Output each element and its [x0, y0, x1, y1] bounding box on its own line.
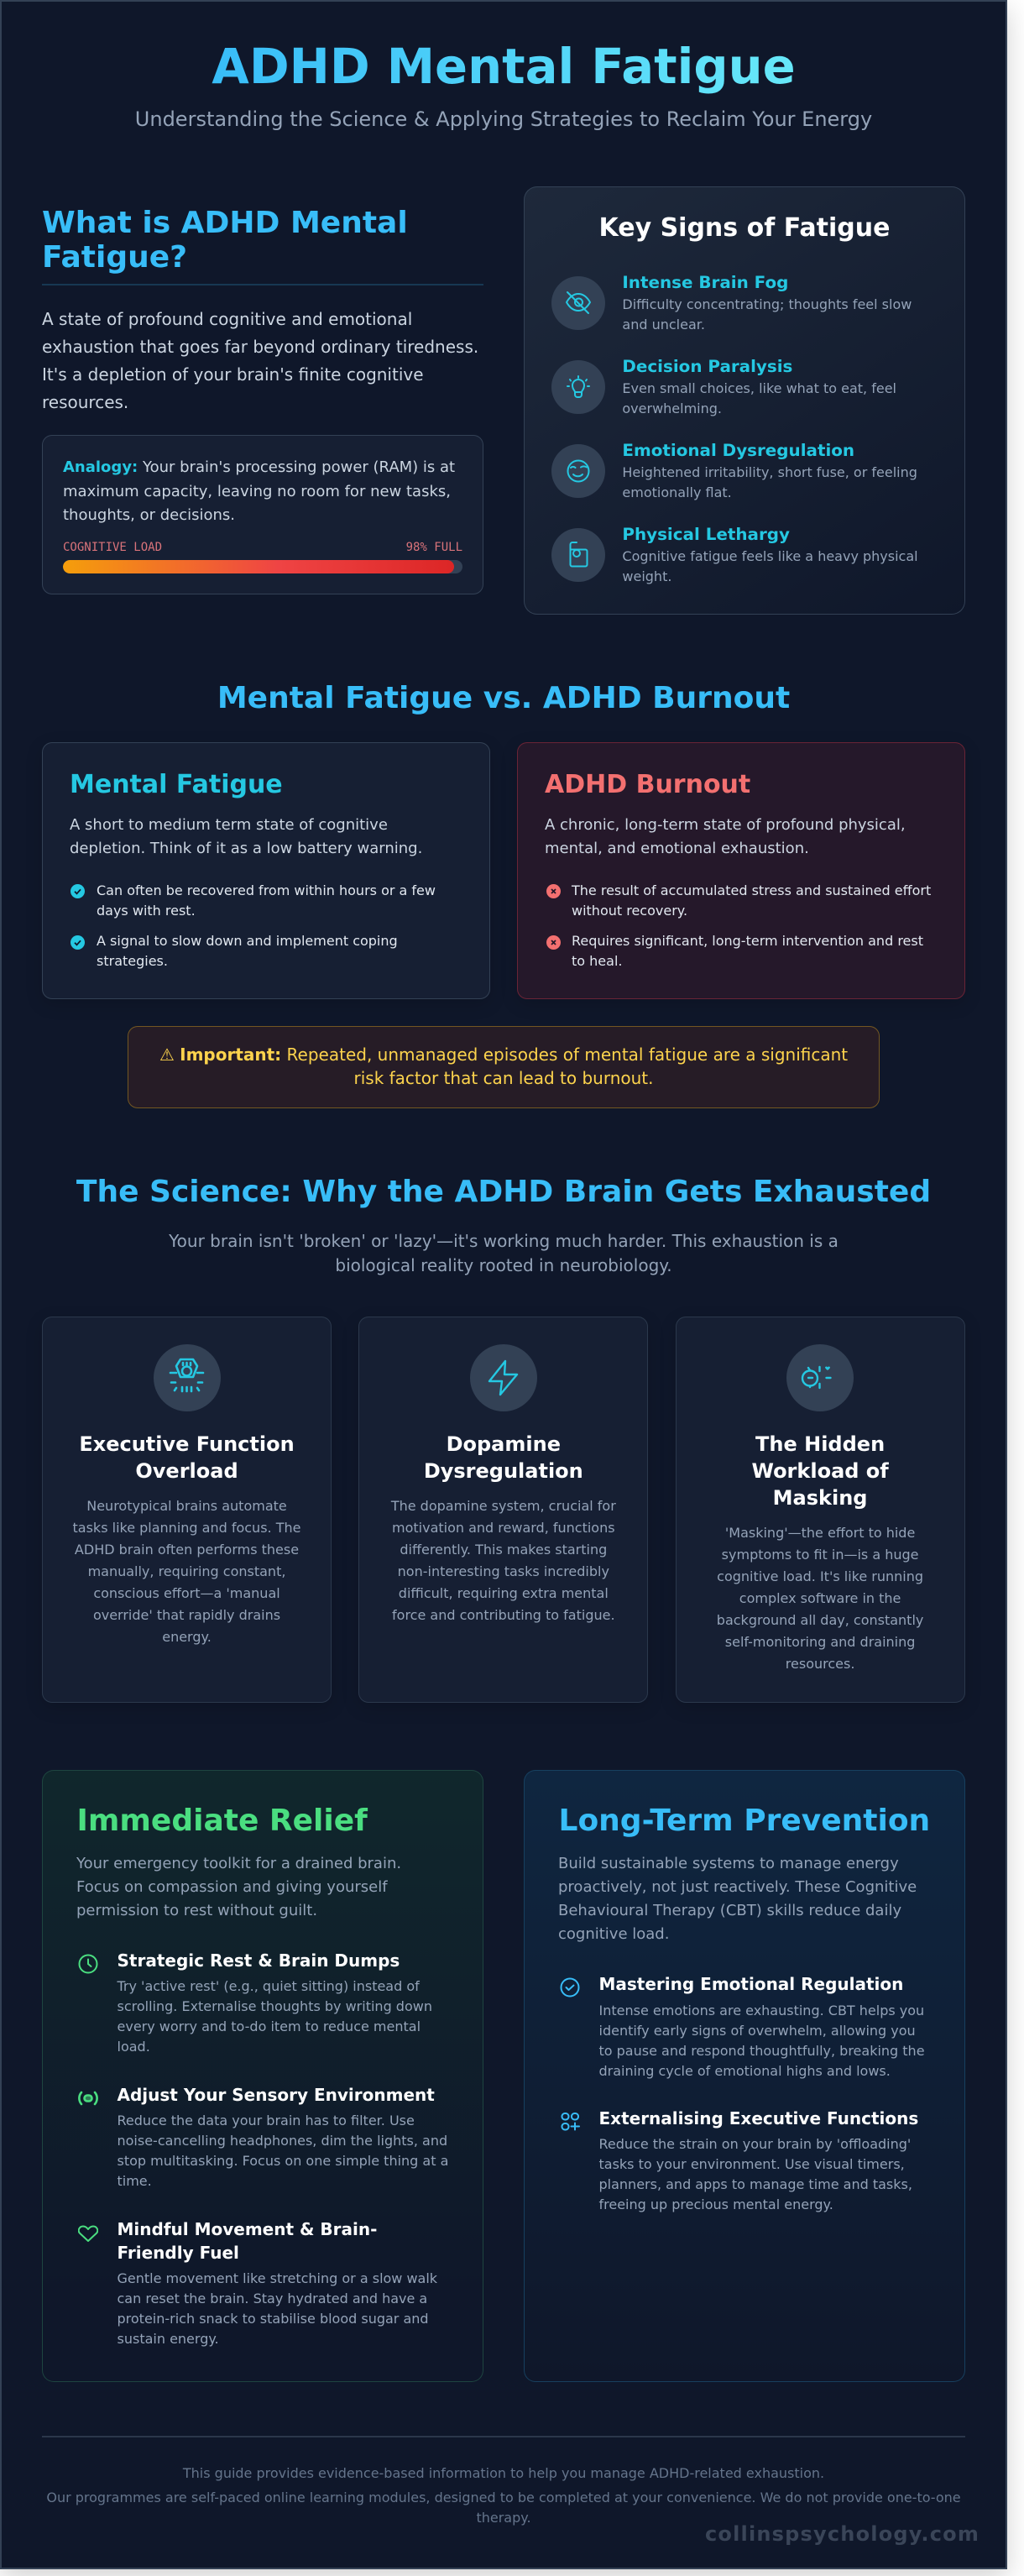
sign: brain fog text: Difficulty concentrating; thoughts feel slow — [622, 296, 912, 312]
sign: physical lethargy title: Physical Lethargy — [622, 525, 790, 544]
card text: ADHD brain often performs these — [75, 1542, 299, 1557]
card text — [72, 1498, 300, 1644]
list item text: A signal to slow down and implement coping — [97, 932, 398, 949]
definition text: resources. — [42, 392, 128, 412]
relief item text: time. — [118, 2173, 152, 2188]
icon: face — [551, 444, 605, 498]
icon: heart — [78, 2225, 98, 2242]
prevention intro: proactively, not just reactively. These Cognitive — [558, 1878, 917, 1896]
footer note: This guide provides evidence-based information to help you manage ADHD-related exhaustion. — [183, 2465, 824, 2481]
list item text — [97, 932, 398, 969]
relief item text: protein-rich snack to stabilise blood sugar and — [118, 2311, 429, 2326]
card heading: Workload of — [751, 1459, 889, 1483]
panel: long-term prevention — [524, 1770, 965, 2382]
relief heading: Immediate Relief — [77, 1804, 368, 1837]
sign: emotional dysregulation title: Emotional Dysregulation — [622, 441, 854, 460]
panel: immediate relief — [42, 1770, 483, 2382]
relief item text: scrolling. Externalise thoughts by writing down — [118, 1998, 432, 2013]
relief item text — [118, 2113, 448, 2188]
relief intro: permission to rest without guilt. — [76, 1902, 317, 1919]
prevention item text: planners, and apps to manage time and tasks, — [599, 2176, 912, 2191]
card text: conscious effort—a 'manual — [93, 1585, 280, 1600]
sign: decision paralysis text — [622, 380, 896, 416]
sign: decision paralysis title: Decision Paralysis — [622, 357, 792, 376]
footer disclaimer: Our programmes are self-paced online learning modules, designed to be completed at your convenience. We do not provide one-to-one — [46, 2489, 961, 2505]
definition text — [42, 309, 478, 412]
footer disclaimer: therapy. — [476, 2509, 531, 2526]
icon: brain — [154, 1344, 221, 1411]
icon: squares plus — [560, 2112, 580, 2132]
panel: executive function overload — [42, 1317, 332, 1703]
list item text: The result of accumulated stress and sustained effort — [572, 882, 931, 898]
card heading: Masking — [773, 1486, 868, 1510]
relief intro: Focus on compassion and giving yourself — [76, 1878, 388, 1896]
callout text: ⚠ Important: Repeated, unmanaged episodes of mental fatigue are a significant — [159, 1045, 848, 1065]
heading: fatigue vs burnout: Mental Fatigue vs. ADHD Burnout — [217, 681, 790, 715]
card heading: Dysregulation — [424, 1459, 583, 1483]
callout text: risk factor that can lead to burnout. — [354, 1068, 653, 1088]
card text: tasks like planning and focus. The — [73, 1520, 300, 1535]
card text: The dopamine system, crucial for — [391, 1498, 616, 1513]
icon: sensory signal — [78, 2091, 98, 2106]
label: cognitive load: COGNITIVE LOAD — [63, 541, 162, 554]
icon: weight — [551, 528, 605, 582]
relief item text: every worry and to-do item to reduce mental — [118, 2018, 421, 2034]
relief item text: Reduce the data your brain has to filter. Use — [118, 2113, 415, 2128]
heading: what is ADHD mental fatigue: Fatigue? — [42, 240, 187, 275]
progress fill 98% — [63, 560, 454, 573]
icon: cross — [546, 884, 561, 898]
card text: 'Masking'—the effort to hide — [725, 1525, 915, 1540]
card text: Neurotypical brains automate — [86, 1498, 287, 1513]
panel: analogy — [42, 435, 483, 594]
sign: emotional dysregulation text: emotionally flat. — [622, 484, 732, 500]
icon: check — [71, 884, 85, 898]
icon: masking — [786, 1344, 854, 1411]
analogy text: maximum capacity, leaving no room for new tasks, — [63, 483, 451, 500]
mental fatigue description: A short to medium term state of cognitive — [70, 816, 388, 834]
icon: cross — [546, 935, 561, 950]
card heading — [751, 1432, 889, 1510]
burnout description — [545, 816, 906, 857]
analogy text — [63, 458, 455, 524]
relief intro — [76, 1854, 401, 1919]
card heading: Overload — [135, 1459, 238, 1483]
definition text: It's a depletion of your brain's finite cognitive — [42, 364, 424, 385]
prevention item text: Reduce the strain on your brain by 'offloading' — [599, 2136, 911, 2151]
sign: decision paralysis text: Even small choices, like what to eat, feel — [622, 380, 896, 396]
key signs heading: Key Signs of Fatigue — [599, 213, 890, 243]
relief item text: sustain energy. — [118, 2331, 219, 2346]
science intro text: biological reality rooted in neurobiology. — [335, 1255, 672, 1275]
card text: symptoms to fit in—is a huge — [722, 1547, 918, 1562]
icon: eye off — [551, 276, 605, 330]
list item text — [571, 882, 931, 919]
panel: hidden workload of masking — [676, 1317, 965, 1703]
card heading: The Hidden — [755, 1432, 885, 1456]
callout text — [159, 1045, 848, 1088]
burnout description: mental, and emotional exhaustion. — [545, 840, 809, 857]
relief item text: Try 'active rest' (e.g., quiet sitting) instead of — [118, 1978, 420, 1993]
sign: physical lethargy text: weight. — [622, 568, 671, 584]
card heading — [79, 1432, 295, 1483]
icon: lightning — [470, 1344, 537, 1411]
relief item text: can reset the brain. Stay hydrated and have a — [118, 2291, 427, 2306]
card text: override' that rapidly drains — [93, 1607, 280, 1622]
sign: physical lethargy text — [622, 548, 918, 584]
card text: cognitive load. It's like running — [717, 1568, 923, 1584]
card text: energy. — [162, 1629, 212, 1644]
card text — [391, 1498, 616, 1622]
relief item text: noise-cancelling headphones, dim the lights, and — [118, 2133, 447, 2148]
card text: resources. — [786, 1656, 854, 1671]
card heading: Executive Function — [79, 1432, 295, 1456]
heading: the science: The Science: Why the ADHD Brain Gets Exhausted — [76, 1174, 931, 1209]
prevention intro: cognitive load. — [558, 1925, 669, 1943]
burnout description: A chronic, long-term state of profound physical, — [545, 816, 906, 834]
callout: important — [128, 1026, 880, 1108]
relief item text: load. — [118, 2039, 150, 2054]
prevention item text: identify early signs of overwhelm, allowing you — [599, 2022, 916, 2039]
relief item heading — [118, 2219, 377, 2263]
icon: check — [71, 935, 85, 950]
relief intro: Your emergency toolkit for a drained brain. — [76, 1854, 401, 1872]
panel: key signs of fatigue — [524, 186, 965, 615]
icon: clock — [79, 1955, 97, 1973]
card heading — [424, 1432, 583, 1483]
sign: emotional dysregulation text: Heightened irritability, short fuse, or feeling — [622, 464, 917, 480]
list item text: strategies. — [97, 952, 168, 969]
prevention item text: freeing up precious mental energy. — [599, 2196, 833, 2212]
card text: force and contributing to fatigue. — [392, 1607, 615, 1622]
card text: difficult, requiring extra mental — [399, 1585, 609, 1600]
progress bar — [63, 560, 462, 573]
label: 98% full: 98% FULL — [406, 541, 462, 554]
relief item heading: Friendly Fuel — [118, 2243, 239, 2263]
sign: decision paralysis text: overwhelming. — [622, 401, 722, 416]
list item text: Can often be recovered from within hours or a few — [97, 882, 436, 898]
heading: what is ADHD mental fatigue: What is ADHD Mental — [42, 206, 408, 240]
analogy text: Analogy: Your brain's processing power (RAM) is at — [63, 458, 455, 476]
sign: brain fog text: and unclear. — [622, 317, 705, 332]
prevention item text: tasks to your environment. Use visual timers, — [599, 2156, 905, 2171]
card text: manually, requiring constant, — [88, 1563, 285, 1579]
list item text: without recovery. — [572, 902, 687, 919]
sign: physical lethargy text: Cognitive fatigue feels like a heavy physical — [622, 548, 918, 564]
heading: what is ADHD mental fatigue — [42, 206, 408, 275]
prevention item heading: Mastering Emotional Regulation — [599, 1974, 903, 1994]
panel: mental fatigue — [42, 742, 490, 999]
icon: check circle — [560, 1977, 580, 1997]
mental fatigue description — [70, 816, 422, 857]
card text: non-interesting tasks incredibly — [398, 1563, 609, 1579]
prevention item heading: Externalising Executive Functions — [599, 2108, 918, 2128]
list item text: days with rest. — [97, 902, 196, 919]
footer disclaimer — [0, 2487, 1007, 2527]
relief item heading: Adjust Your Sensory Environment — [118, 2085, 435, 2105]
analogy text: thoughts, or decisions. — [63, 506, 235, 524]
card text: complex software in the — [739, 1590, 901, 1605]
relief item heading: Strategic Rest & Brain Dumps — [118, 1950, 400, 1971]
mental fatigue heading: Mental Fatigue — [70, 770, 283, 799]
subtitle: Understanding the Science & Applying Strategies to Reclaim Your Energy — [135, 107, 872, 131]
card text: differently. This makes starting — [400, 1542, 607, 1557]
watermark: collinspsychology.com — [705, 2522, 980, 2546]
prevention heading: Long-Term Prevention — [559, 1804, 930, 1837]
prevention intro — [558, 1852, 917, 1946]
card text: motivation and reward, functions — [392, 1520, 615, 1535]
list item text — [572, 932, 923, 969]
sign: emotional dysregulation text — [622, 464, 917, 500]
icon: light bulb — [551, 360, 605, 414]
relief item text — [117, 1978, 432, 2054]
card text: self-monitoring and draining — [725, 1634, 915, 1649]
panel: ADHD burnout — [517, 742, 965, 999]
card heading: Dopamine — [447, 1432, 561, 1456]
prevention item text: Intense emotions are exhausting. CBT helps you — [599, 2002, 924, 2018]
card text — [717, 1525, 923, 1671]
title: ADHD Mental Fatigue — [212, 39, 796, 95]
prevention item text: draining cycle of emotional highs and lows. — [599, 2062, 891, 2079]
list item text: Requires significant, long-term intervention and rest — [572, 932, 923, 949]
prevention item text — [599, 2134, 912, 2215]
sign: brain fog text — [622, 296, 912, 332]
prevention intro: Behavioural Therapy (CBT) skills reduce daily — [558, 1902, 901, 1919]
panel: dopamine dysregulation — [358, 1317, 648, 1703]
science intro text — [169, 1231, 839, 1275]
prevention item text — [599, 2000, 925, 2081]
list item text: to heal. — [572, 952, 622, 969]
list item text — [97, 882, 436, 919]
relief item text — [118, 2269, 437, 2349]
definition text: A state of profound cognitive and emotional — [42, 309, 412, 329]
definition text: exhaustion that goes far beyond ordinary tiredness. — [42, 337, 478, 357]
relief item heading: Mindful Movement & Brain- — [118, 2219, 377, 2239]
prevention intro: Build sustainable systems to manage energy — [558, 1854, 899, 1872]
relief item text: Gentle movement like stretching or a slow walk — [118, 2270, 437, 2285]
mental fatigue description: depletion. Think of it as a low battery warning. — [70, 840, 422, 857]
sign: brain fog title: Intense Brain Fog — [622, 273, 788, 292]
card text: background all day, constantly — [717, 1612, 923, 1627]
burnout heading: ADHD Burnout — [545, 770, 750, 799]
prevention item text: to pause and respond thoughtfully, breaking the — [599, 2042, 925, 2059]
science intro text: Your brain isn't 'broken' or 'lazy'—it's working much harder. This exhaustion is a — [169, 1231, 839, 1251]
relief item text: stop multitasking. Focus on one simple thing at a — [118, 2153, 448, 2168]
